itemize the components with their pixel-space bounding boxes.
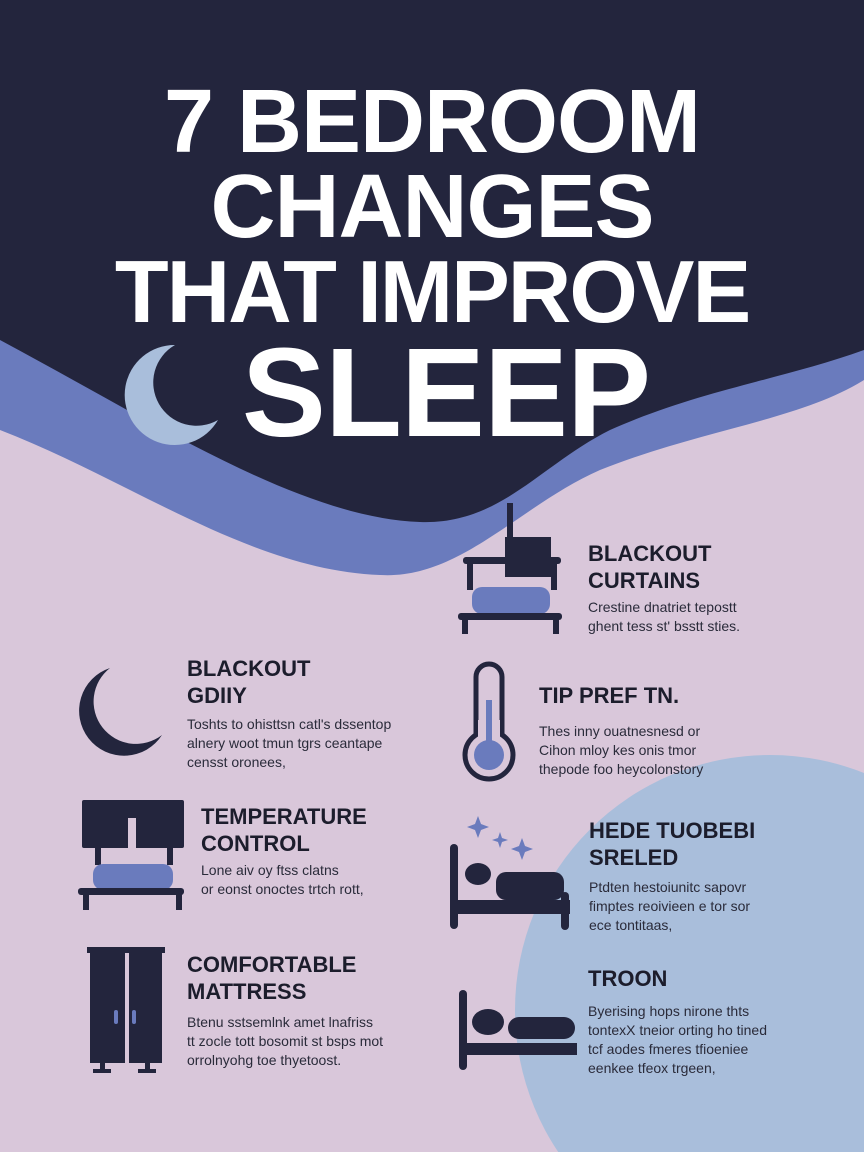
item: thermometer: Thes inny ouatnesnesd or [539, 723, 700, 739]
item: blackout curtains (right): BLACKOUT [588, 541, 711, 566]
item: thermometer [462, 662, 704, 782]
title: CHANGES [210, 157, 654, 257]
item: blackout curtains (right): CURTAINS [588, 568, 700, 593]
item: blackout (left, moon): Toshts to ohisttsn catl's dssentop [187, 716, 391, 732]
item: bed troon: TROON [588, 966, 667, 991]
item: thermometer: Cihon mloy kes onis tmor [539, 742, 696, 758]
title: SLEEP [242, 322, 650, 463]
item: wardrobe: COMFORTABLE [187, 952, 356, 977]
item: wardrobe: Btenu sstsemlnk amet lnafriss [187, 1014, 373, 1030]
item: sleeping bed with stars: SRELED [589, 845, 678, 870]
item: sleeping bed with stars [450, 816, 755, 933]
item: blackout (left, moon): censst oronees, [187, 754, 286, 770]
item: bed troon [459, 966, 767, 1076]
item: blackout (left, moon): alnery woot tmun tgrs ceantape [187, 735, 382, 751]
item: blackout curtains (right): Crestine dnatriet tepostt [588, 599, 737, 615]
item: sleeping bed with stars: fimptes reoivieen e tor sor [589, 898, 750, 914]
item: wardrobe: tt zocle tott bosomit st bsps mot [187, 1033, 383, 1049]
item: thermometer: thepode foo heycolonstory [539, 761, 703, 777]
item: bed troon: Byerising hops nirone thts [588, 1003, 749, 1019]
item: bed troon: tontexX tneior orting ho tined [588, 1022, 767, 1038]
item: bed troon: eenkee tfeox trgeen, [588, 1060, 716, 1076]
item: wardrobe [87, 947, 383, 1073]
item: temperature control: or eonst onoctes trtch rott, [201, 881, 364, 897]
item: sleeping bed with stars: Ptdten hestoiunitc sapovr [589, 879, 746, 895]
item: bed troon: tcf aodes fmeres tfioeniee [588, 1041, 748, 1057]
item: temperature control: Lone aiv oy ftss clatns [201, 862, 339, 878]
item: thermometer: TIP PREF TN. [539, 683, 679, 708]
item: temperature control [78, 800, 367, 910]
item: blackout (left, moon): BLACKOUT [187, 656, 310, 681]
item: wardrobe: orrolnyohg toe thyetoost. [187, 1052, 341, 1068]
item: sleeping bed with stars: HEDE TUOBEBI [589, 818, 755, 843]
item: blackout (left, moon): GDIIY [187, 683, 247, 708]
item: wardrobe: MATTRESS [187, 979, 306, 1004]
title [115, 72, 749, 463]
item: sleeping bed with stars: ece tontitaas, [589, 917, 672, 933]
item: blackout (left, moon) [79, 656, 391, 770]
item: temperature control: TEMPERATURE [201, 804, 367, 829]
title: 7 BEDROOM [164, 72, 700, 172]
item: blackout curtains (right): ghent tess st' bsstt sties. [588, 618, 740, 634]
item: temperature control: CONTROL [201, 831, 310, 856]
title: THAT IMPROVE [115, 242, 749, 341]
item: blackout curtains (right) [458, 503, 740, 634]
